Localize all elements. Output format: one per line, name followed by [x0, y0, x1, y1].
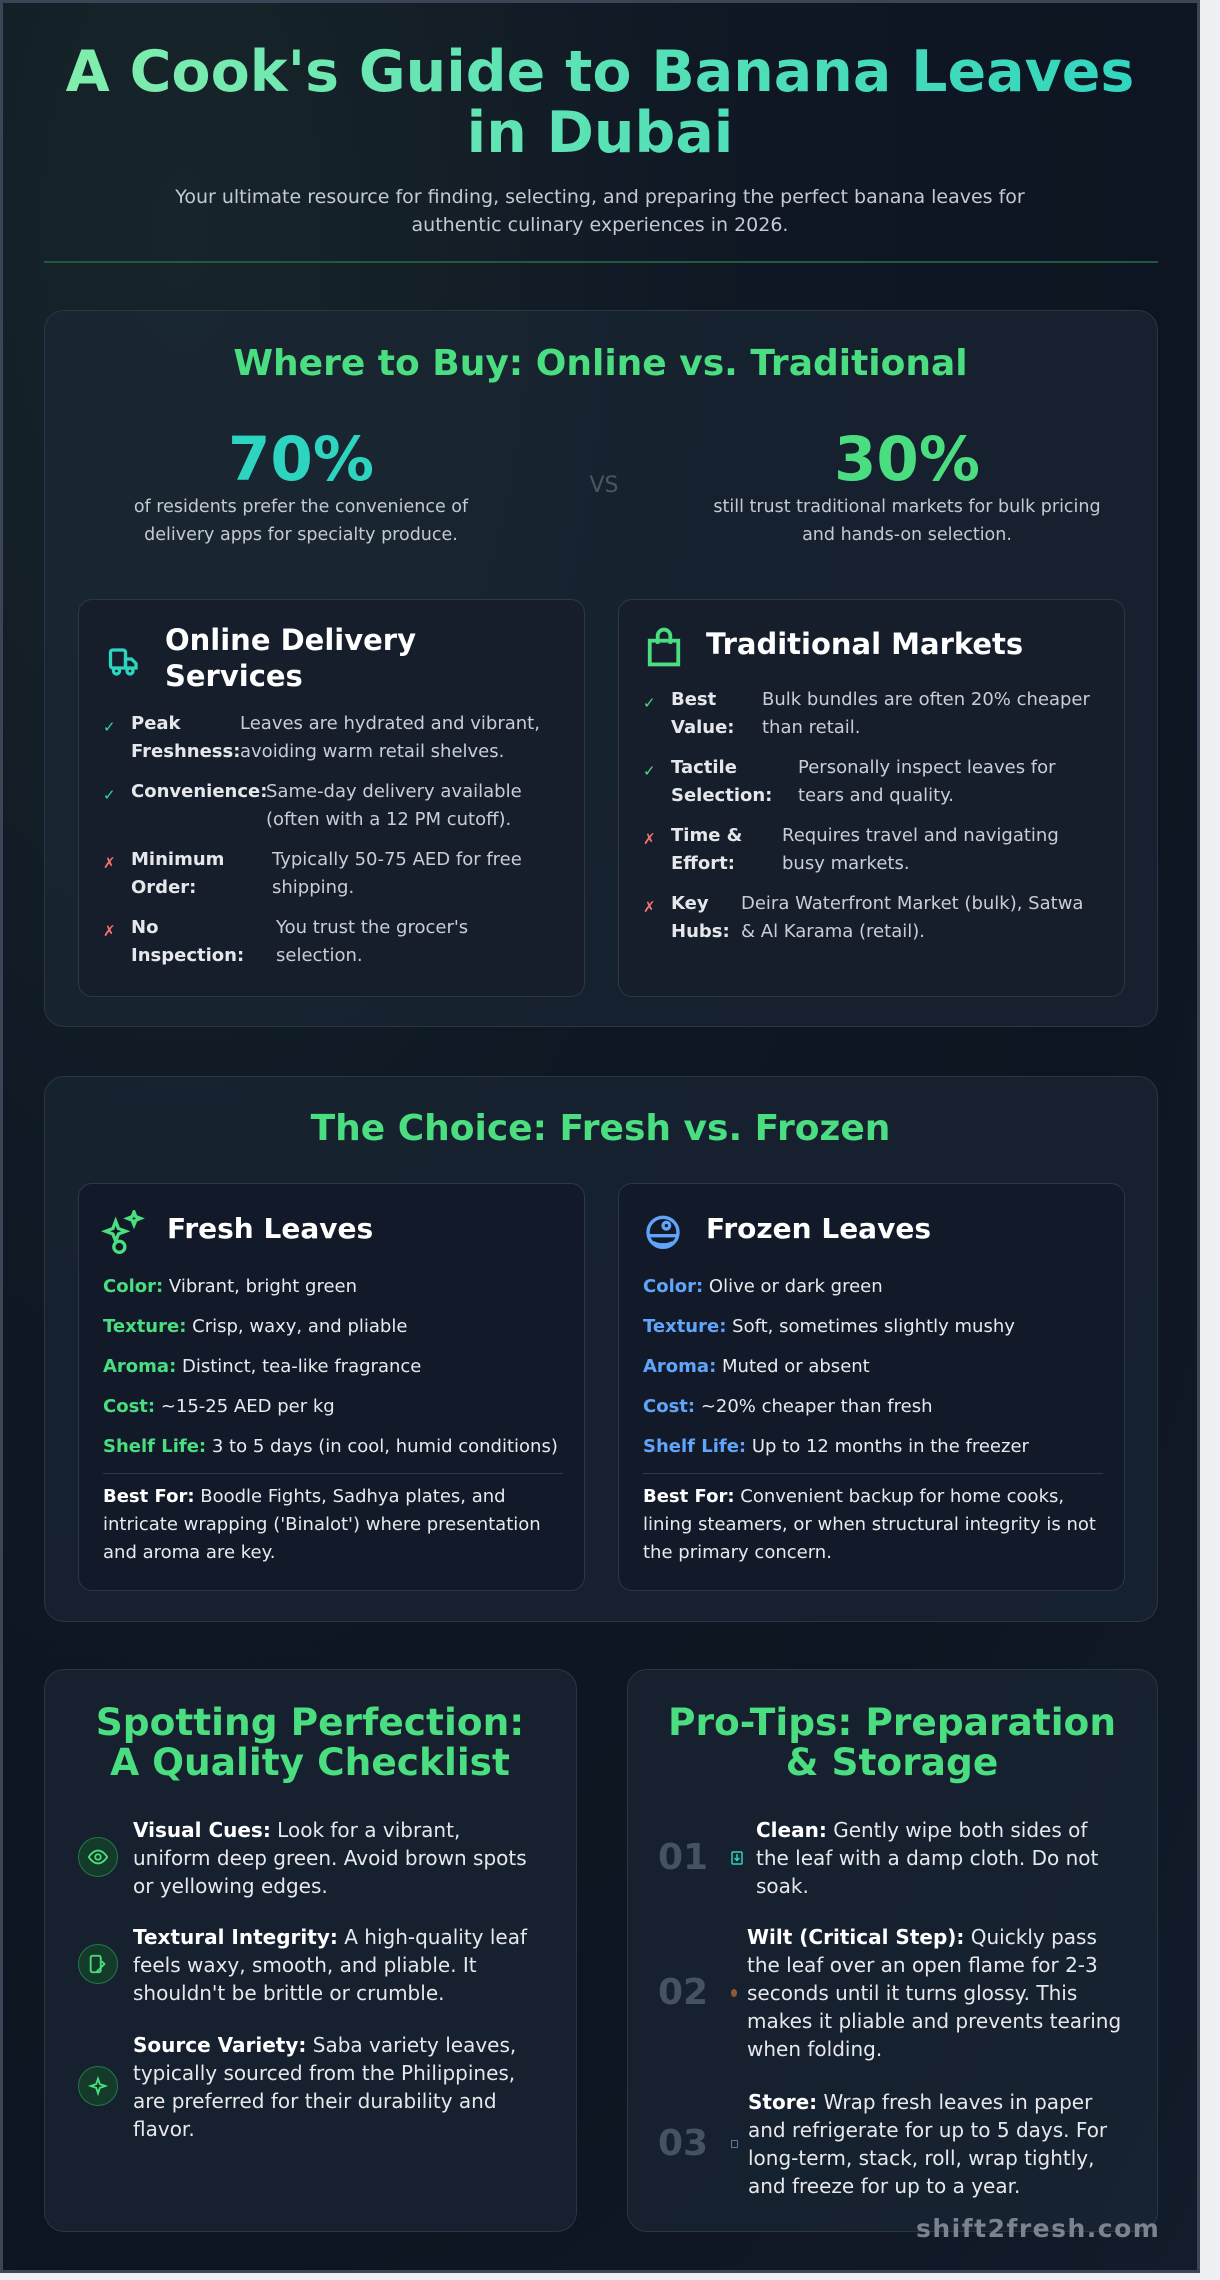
card: online delivery: [78, 599, 585, 997]
tip 01: 01: [658, 1837, 708, 1878]
list: You trust the grocer's selection.: [276, 917, 468, 966]
item: textural integrity: Textural Integrity: A high-quality leaf feels waxy, smooth, and pliable. It shouldn't be brittle or crumble.: [133, 1925, 527, 2005]
attributes: [103, 1276, 563, 1563]
title: [3, 42, 1197, 164]
list: Inspection:: [131, 945, 244, 966]
list: ✓: [103, 718, 116, 736]
panel: pro tips: [627, 1669, 1158, 2232]
list: Leaves are hydrated and vibrant, avoiding warm retail shelves.: [240, 713, 540, 762]
list: Best: [671, 689, 716, 710]
icon: eye: [78, 1837, 118, 1877]
list: Convenience:: [131, 781, 267, 802]
list: Deira Waterfront Market (bulk), Satwa & Al Karama (retail).: [741, 893, 1083, 942]
list: ✗: [103, 922, 116, 940]
tip 01: Clean: Gently wipe both sides of the leaf with a damp cloth. Do not soak.: [756, 1818, 1098, 1898]
list: Key: [671, 893, 709, 914]
heading: fresh vs frozen: The Choice: Fresh vs. Frozen: [311, 1108, 890, 1149]
attributes: Aroma: Distinct, tea-like fragrance: [103, 1356, 421, 1377]
vs label: VS: [589, 473, 618, 498]
panel: quality checklist: [44, 1669, 577, 2232]
list: ✗: [643, 898, 656, 916]
list: ✓: [643, 762, 656, 780]
list: Tactile: [671, 757, 737, 778]
icon: shopping bag: [648, 628, 680, 666]
icon: flame: [731, 1989, 737, 1997]
stat: 70%: of residents prefer the convenience of delivery apps for specialty produce.: [134, 497, 468, 545]
card: frozen leaves: [618, 1183, 1125, 1591]
icon: clean: [731, 1851, 743, 1865]
list: Order:: [131, 877, 196, 898]
list: Requires travel and navigating busy markets.: [782, 825, 1059, 874]
attributes: Shelf Life: Up to 12 months in the freezer: [643, 1436, 1029, 1457]
stat: 70%: [134, 424, 468, 545]
heading: pro tips: Pro-Tips: Preparation: [668, 1700, 1116, 1744]
attributes: Texture: Soft, sometimes slightly mushy: [643, 1316, 1015, 1337]
tip 02: 02: [658, 1972, 708, 2013]
list: [643, 689, 1090, 942]
list: ✗: [643, 830, 656, 848]
list: [103, 713, 540, 966]
attributes: Color: Vibrant, bright green: [103, 1276, 357, 1297]
card: traditional markets: [618, 599, 1125, 997]
attributes: Color: Olive or dark green: [643, 1276, 883, 1297]
list: ✓: [643, 694, 656, 712]
item: visual cues: Visual Cues: Look for a vibrant, uniform deep green. Avoid brown spots or yellowing edges.: [133, 1818, 527, 1898]
list: ✗: [103, 854, 116, 872]
watermark: shift2fresh.com: [916, 2214, 1160, 2243]
attributes: Best For: Convenient backup for home cooks, lining steamers, or when structural integrity is not the primary concern.: [643, 1486, 1096, 1563]
heading: pro tips: & Storage: [786, 1740, 998, 1784]
icon: leaf texture: [78, 1944, 118, 1984]
card title: Traditional Markets: [706, 627, 1023, 661]
attributes: Shelf Life: 3 to 5 days (in cool, humid conditions): [103, 1436, 558, 1457]
card title: Frozen Leaves: [706, 1212, 931, 1245]
card title: Online Delivery Services: [165, 623, 416, 693]
list: Typically 50-75 AED for free shipping.: [272, 849, 522, 898]
title: in Dubai: [467, 100, 733, 166]
attributes: Cost: ~20% cheaper than fresh: [643, 1396, 932, 1417]
attributes: Cost: ~15-25 AED per kg: [103, 1396, 335, 1417]
heading: quality checklist: Spotting Perfection:: [96, 1700, 524, 1744]
item: source variety: Source Variety: Saba variety leaves, typically sourced from the Philippines, are preferred for their durability and flavor.: [133, 2033, 516, 2141]
card title: Fresh Leaves: [167, 1212, 373, 1245]
panel: where to buy: [44, 310, 1158, 1027]
heading: quality checklist: [96, 1700, 524, 1784]
attributes: Aroma: Muted or absent: [643, 1356, 870, 1377]
attributes: [643, 1276, 1103, 1563]
list: No: [131, 917, 158, 938]
list: Effort:: [671, 853, 735, 874]
heading: where to buy: Where to Buy: Online vs. Traditional: [233, 343, 968, 384]
list: Minimum: [131, 849, 224, 870]
list: Time &: [671, 825, 742, 846]
heading: quality checklist: A Quality Checklist: [110, 1740, 510, 1784]
title: A Cook's Guide to Banana Leaves: [66, 39, 1134, 105]
panel: fresh vs frozen: [44, 1076, 1158, 1622]
list: Freshness:: [131, 741, 240, 762]
attributes: Best For: Boodle Fights, Sadhya plates, and intricate wrapping ('Binalot') where presentation and aroma are key.: [103, 1486, 541, 1563]
list: Same-day delivery available (often with a 12 PM cutoff).: [266, 781, 522, 830]
card: fresh leaves: [78, 1183, 585, 1591]
list: Hubs:: [671, 921, 730, 942]
list: Personally inspect leaves for tears and quality.: [798, 757, 1056, 806]
icon: delivery truck: [108, 648, 138, 676]
heading: pro tips: [668, 1700, 1116, 1784]
icon: snow globe: [646, 1216, 680, 1249]
subtitle: Your ultimate resource for finding, selecting, and preparing the perfect banana leaves for authentic culinary experiences in 2026.: [175, 186, 1025, 236]
icon: sparkle: [78, 2066, 118, 2106]
list: ✓: [103, 786, 116, 804]
tip 03: 03: [658, 2123, 708, 2164]
tip 03: Store: Wrap fresh leaves in paper and refrigerate for up to 5 days. For long-term, stack, roll, wrap tightly, and freeze for up to a year.: [748, 2090, 1107, 2198]
list: Bulk bundles are often 20% cheaper than retail.: [762, 689, 1090, 738]
list: Selection:: [671, 785, 772, 806]
stat: 70%: 70%: [228, 424, 374, 495]
icon: store: [731, 2140, 738, 2148]
list: Value:: [671, 717, 734, 738]
list: Peak: [131, 713, 181, 734]
stat: 30%: 30%: [834, 424, 980, 495]
tip 02: Wilt (Critical Step): Quickly pass the leaf over an open flame for 2-3 seconds until it turns glossy. This makes it pliable and prevents tearing when folding.: [747, 1925, 1121, 2061]
attributes: Texture: Crisp, waxy, and pliable: [103, 1316, 407, 1337]
stat: 30%: still trust traditional markets for bulk pricing and hands-on selection.: [713, 497, 1101, 545]
icon: sparkles: [101, 1210, 145, 1254]
stat: 30%: [713, 424, 1101, 545]
